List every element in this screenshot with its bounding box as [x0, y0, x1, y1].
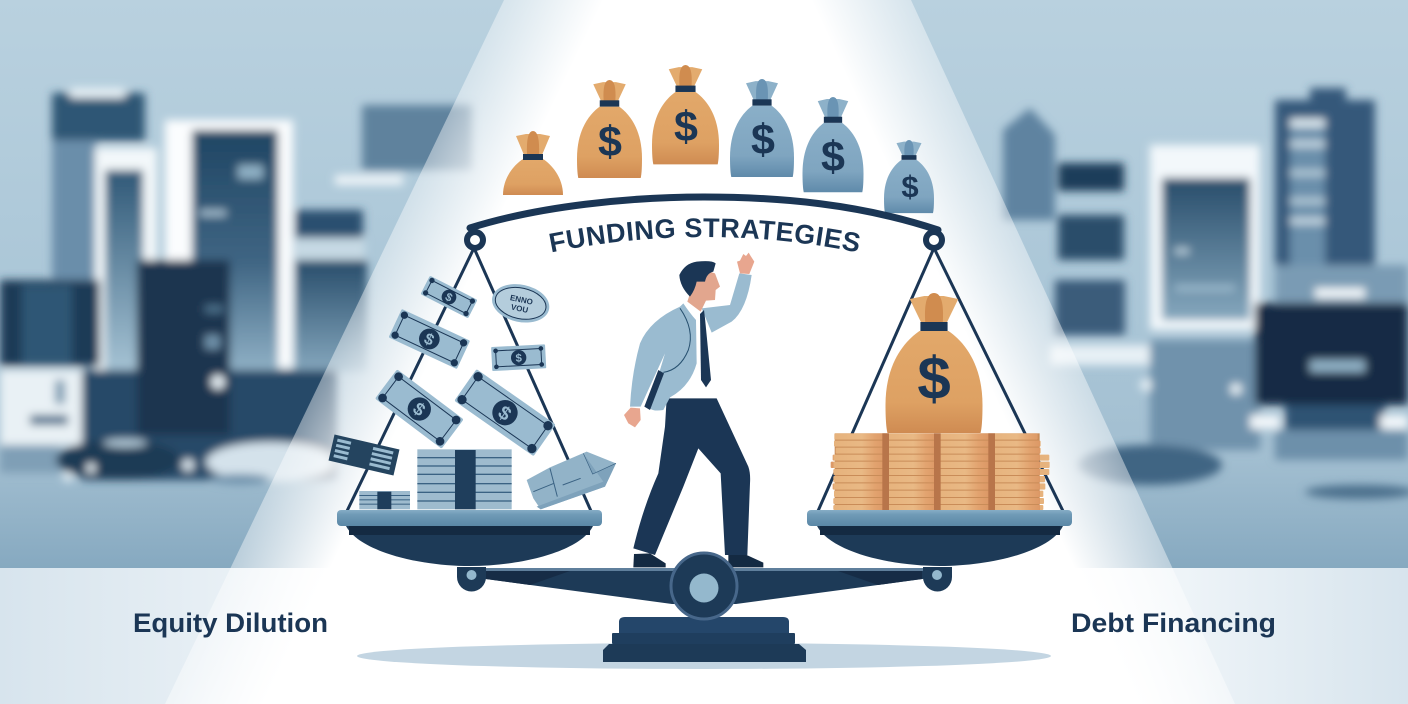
note a	[421, 276, 477, 318]
raised arm	[702, 273, 752, 333]
spotlight beam	[165, 0, 1235, 704]
money bag 2 (orange)	[577, 80, 642, 178]
note d	[454, 369, 556, 456]
ground shadow	[357, 643, 1051, 669]
dollar sign 4: $	[751, 116, 775, 164]
note b	[389, 309, 470, 369]
hair	[679, 261, 716, 297]
note c: $	[409, 398, 429, 420]
note e: $	[515, 352, 523, 365]
businessman	[624, 253, 763, 567]
left pan	[337, 510, 602, 566]
curved title: FUNDING STRATEGIES	[549, 218, 860, 252]
note d: $	[494, 402, 515, 426]
right hinge	[923, 567, 952, 592]
dollar sign large: $	[917, 345, 951, 412]
scale strings	[347, 248, 1063, 511]
oval coin tag: VOU	[510, 303, 529, 315]
trousers	[633, 398, 750, 555]
note e	[491, 344, 546, 371]
left skyline buildings	[0, 88, 472, 484]
right skyline buildings	[1003, 88, 1408, 499]
dollar sign 3: $	[674, 103, 698, 151]
dollar sign 6: $	[901, 169, 919, 204]
right shoe	[728, 555, 763, 567]
stacked bills	[831, 433, 1050, 510]
money bag 1 (orange small)	[503, 131, 563, 195]
pivot	[671, 553, 737, 619]
raised hand	[737, 253, 754, 274]
money bag 4 (blue)	[730, 79, 794, 177]
dark card	[329, 435, 399, 475]
left hinge	[457, 567, 486, 592]
money bag 3 (orange)	[652, 65, 719, 164]
dollar sign 5: $	[821, 133, 845, 181]
right pan	[807, 510, 1072, 566]
label: equity dilution: Equity Dilution	[133, 608, 328, 638]
left pan contents: equity notes	[329, 276, 616, 509]
parcel envelope	[527, 452, 616, 509]
dollar sign 2: $	[598, 118, 622, 166]
jacket	[630, 303, 697, 411]
lapel line	[663, 308, 690, 372]
money bag 6 (blue small)	[884, 140, 934, 213]
left shoe	[633, 553, 666, 567]
tie	[700, 310, 711, 387]
label: debt financing: Debt Financing	[1071, 608, 1276, 638]
large cash stack	[417, 449, 512, 509]
oval coin tag	[488, 279, 553, 328]
small cash stack	[359, 491, 410, 509]
money bag 5 (blue)	[802, 97, 864, 192]
face and neck	[687, 268, 720, 312]
lower hand	[624, 408, 641, 427]
shirt	[670, 302, 715, 398]
lower beam	[457, 567, 952, 604]
folder under arm	[644, 370, 664, 410]
right pan cash stack	[831, 433, 1050, 510]
curved top beam with rings	[467, 197, 942, 248]
note c	[375, 369, 464, 449]
money bags arc	[503, 65, 934, 213]
note a: $	[443, 291, 455, 305]
floor band	[0, 568, 1408, 704]
note b: $	[421, 330, 437, 350]
right pan large money bag	[886, 293, 982, 433]
stepped base	[603, 617, 806, 662]
oval coin tag: ENNO	[509, 293, 534, 307]
